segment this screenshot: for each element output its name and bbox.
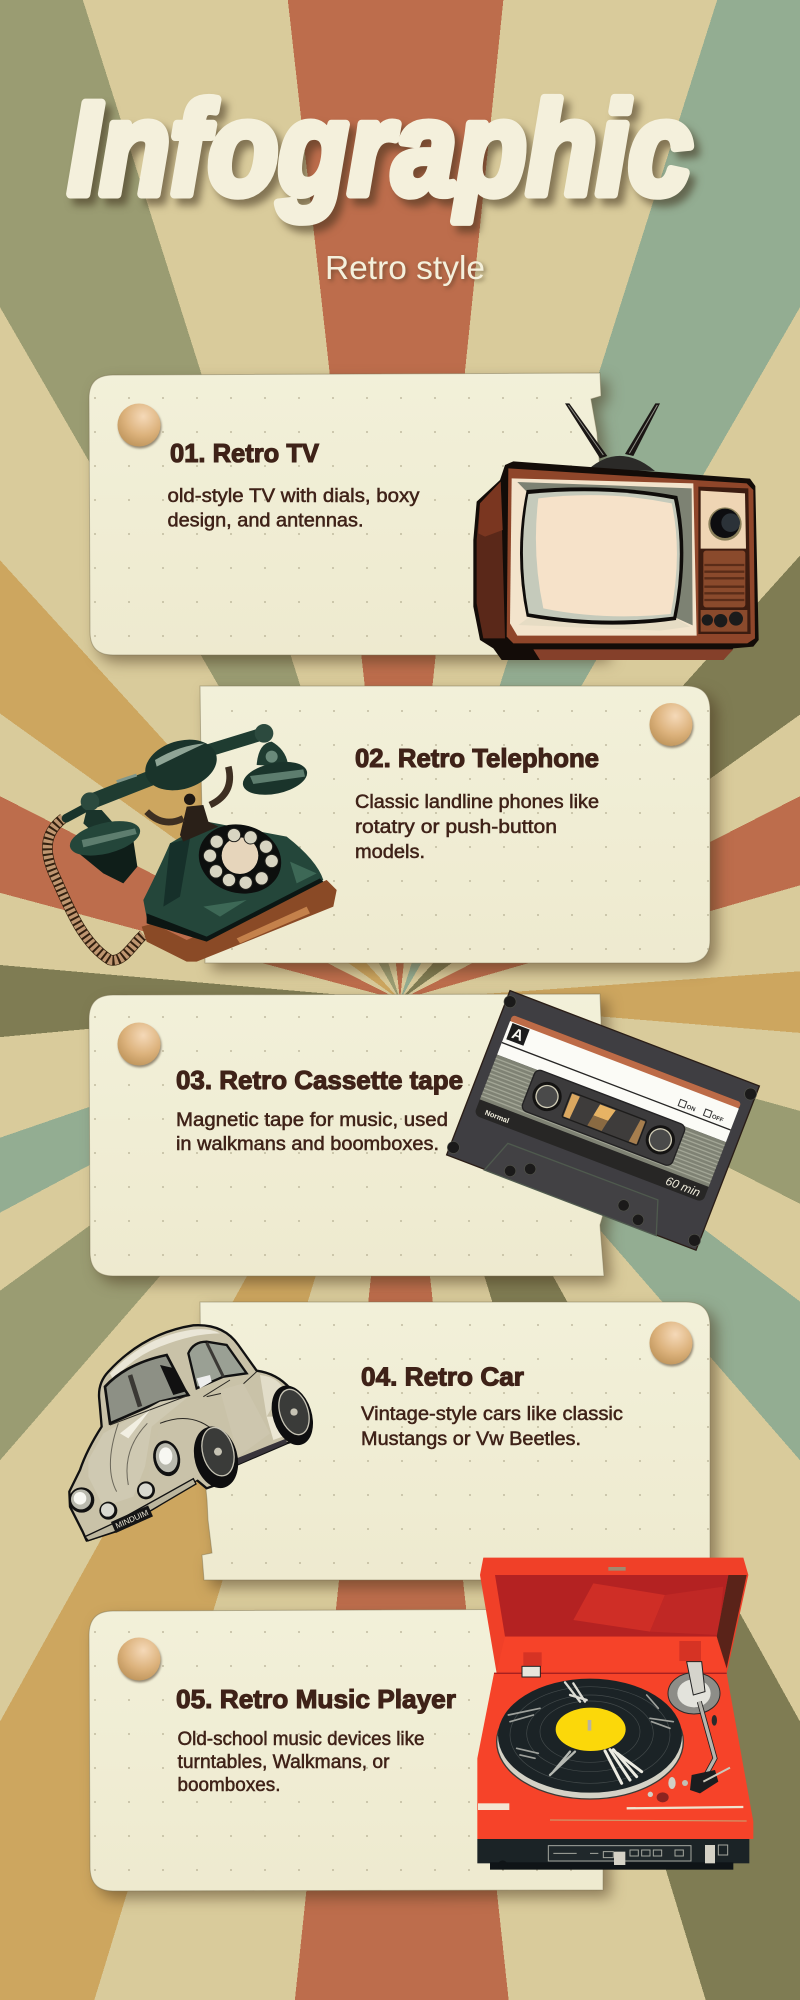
- panel: 02 retro telephone: [47, 686, 710, 963]
- card 2 paper: [200, 686, 710, 963]
- card 5 paper: [89, 1609, 604, 1891]
- text 5: [178, 1729, 424, 1796]
- license plate: MINDUIM: [114, 1508, 150, 1531]
- pin 2: [650, 703, 692, 746]
- text 3: [176, 1110, 448, 1155]
- tape switches: ON: [685, 1105, 696, 1113]
- text 2: Classic landline phones like: [355, 792, 599, 813]
- tape switches: [678, 1099, 725, 1124]
- text 5: boomboxes.: [178, 1775, 280, 1796]
- title: Infographic: [68, 75, 692, 222]
- heading 1: 01. Retro TV: [170, 438, 320, 468]
- text 4: [361, 1404, 623, 1450]
- panel: 05 retro music player: [89, 1558, 753, 1891]
- text 2: [355, 792, 599, 863]
- icon: beetle car: [69, 1325, 320, 1541]
- tape switches: OFF: [711, 1114, 724, 1124]
- panel: 03 retro cassette tape: [89, 990, 760, 1276]
- text 4: Mustangs or Vw Beetles.: [361, 1429, 581, 1450]
- pin 3: [118, 1022, 160, 1066]
- panel: 04 retro car: [69, 1302, 710, 1580]
- text 5: Old-school music devices like: [178, 1729, 424, 1750]
- subtitle: Retro style: [325, 249, 485, 286]
- cassette side label: [506, 1023, 530, 1046]
- card 4 paper: [200, 1302, 710, 1580]
- icon: cassette tape: [444, 990, 760, 1251]
- text 1: design, and antennas.: [168, 510, 364, 532]
- vinyl highlights: [508, 1682, 673, 1783]
- text 2: models.: [355, 842, 425, 863]
- text 3: in walkmans and boomboxes.: [176, 1134, 439, 1155]
- pin 4: [650, 1322, 692, 1364]
- icon: retro TV: [473, 403, 759, 660]
- card 3 paper: [89, 994, 604, 1276]
- icon: cassette tape: 60 min: [664, 1174, 703, 1200]
- icon: turntable: [477, 1558, 753, 1870]
- heading 3: 03. Retro Cassette tape: [176, 1065, 463, 1095]
- card 1 paper: [89, 373, 603, 655]
- license plate: [111, 1505, 153, 1533]
- text 1: [168, 486, 420, 532]
- heading 2: 02. Retro Telephone: [355, 743, 599, 773]
- panel: 01 retro TV: [89, 373, 759, 660]
- text 2: rotatry or push-button: [355, 817, 557, 838]
- heading 5: 05. Retro Music Player: [176, 1684, 456, 1714]
- icon: rotary telephone: [47, 724, 337, 962]
- text 4: Vintage-style cars like classic: [361, 1404, 623, 1425]
- pin 1: [118, 404, 160, 446]
- text 3: Magnetic tape for music, used: [176, 1110, 448, 1131]
- text 1: old-style TV with dials, boxy: [168, 486, 420, 507]
- text 5: turntables, Walkmans, or: [178, 1752, 390, 1773]
- icon: cassette tape: Normal: [484, 1108, 511, 1125]
- pin 5: [118, 1638, 160, 1680]
- cassette side label: A: [509, 1025, 526, 1045]
- heading 4: 04. Retro Car: [361, 1362, 524, 1392]
